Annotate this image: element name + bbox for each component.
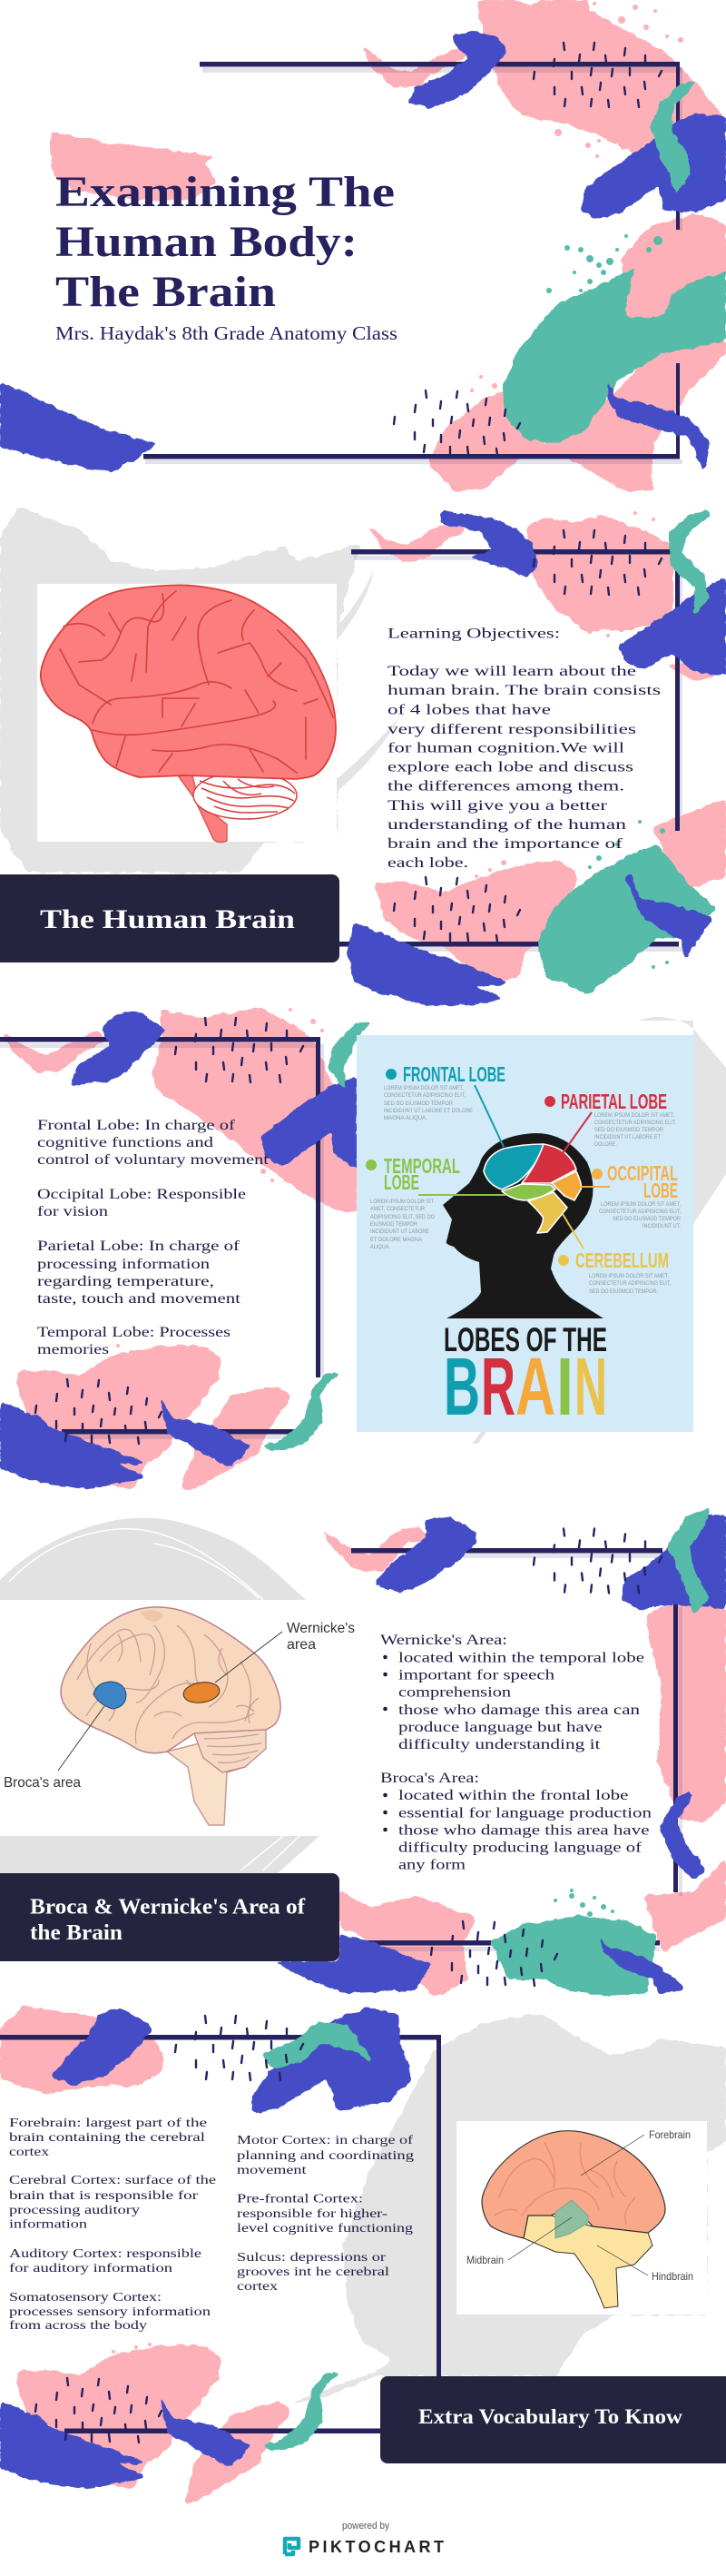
green splatter [546,234,662,293]
tick marks [35,2016,303,2443]
lobe descriptions text: Frontal Lobe: In charge of [37,1118,236,1133]
learning objectives text [388,627,661,871]
vocabulary column one: Forebrain: largest part of the [9,2117,207,2130]
pink brushes [0,2006,291,2502]
vocabulary column one: cortex [9,2146,49,2159]
placeholder captions: MAGNA ALIQUA. [384,1116,427,1121]
subtitle: Mrs. Haydak's 8th Grade Anatomy Class [55,322,397,344]
grey background brain silhouette [0,507,399,873]
placeholder captions: INCIDIDUNT UT LABORE ET [594,1135,661,1140]
title [55,168,395,316]
learning objectives text: for human cognition.We will [388,741,625,755]
lobe labels: LOBE [643,1179,678,1202]
green brush and blue brushes [0,31,726,472]
vocabulary column one: processes sensory information [9,2305,211,2319]
learning objectives text: the differences among them. [388,779,624,794]
blue and green brushes [70,1012,373,1170]
grey background silhouette [273,2014,726,2409]
placeholder captions: CONSECTETUR ADIPISICING ELIT, [384,1093,466,1099]
area bullet lists: any form [398,1858,466,1872]
area bullet lists: important for speech [398,1667,554,1683]
title: The Brain [55,268,276,316]
image: brain with broca and wernicke areas: area [287,1637,316,1653]
panel: title section [0,0,726,490]
lobe descriptions text: regarding temperature, [37,1274,214,1289]
learning objectives text: Learning Objectives: [388,627,560,641]
image: brain with broca and wernicke areas [0,1600,357,1836]
learning objectives text: very different responsibilities [388,722,636,737]
image: forebrain midbrain hindbrain: Midbrain [466,2254,504,2266]
placeholder captions: SED DO EIUSMOD TEMPOR [613,1217,682,1222]
lobe labels: CEREBELLUM [575,1249,669,1272]
learning objectives text: Today we will learn about the [388,664,636,679]
learning objectives text: explore each lobe and discuss [388,759,633,775]
lobe descriptions text: taste, touch and movement [37,1291,241,1307]
blue and green brushes [348,508,726,1005]
tick marks [35,1018,303,1444]
grey background shape [472,1017,726,1444]
vocabulary column two: cortex [237,2280,278,2294]
lower blue and green brushes [0,1371,345,1489]
lobe descriptions text: Temporal Lobe: Processes [37,1325,231,1340]
learning objectives text: understanding of the human [388,817,626,833]
lobe descriptions text [37,1118,270,1357]
placeholder captions: LOREM IPSUM DOLOR SIT AMET, [594,1113,674,1119]
title: Human Body: [55,218,358,266]
poster title: LOBES OF THE [444,1321,607,1358]
pink splatter [475,511,655,878]
placeholder captions: LOREM IPSUM DOLOR SIT AMET, [384,1086,464,1091]
wernicke's area marker [182,1680,221,1705]
vocabulary column one: from across the body [9,2319,147,2333]
poster title: A [515,1342,555,1433]
tick marks [394,530,662,942]
green splatter [588,820,669,969]
title: Examining The [55,168,395,216]
pink brushes [366,515,726,983]
area bullet lists [380,1633,652,1872]
area bullet lists: produce language but have [398,1720,603,1735]
leader lines [418,1085,610,1249]
frame [143,62,682,464]
placeholder captions: CONSECTETUR ADIPISICING ELIT, [589,1281,671,1287]
lower pink brush [18,2345,221,2489]
vocabulary column two: Motor Cortex: in charge of [237,2134,413,2147]
heading: broca and wernicke: Broca & Wernicke's Area of [30,1896,306,1920]
panel: lobes of the brain [0,1007,726,1489]
footer: powered by piktochart [285,2521,444,2556]
lower pink brush [18,1346,221,1489]
pink splatter [112,2343,152,2361]
poster title: N [574,1342,607,1433]
frame [0,1037,324,1439]
learning objectives text: each lobe. [388,855,468,871]
placeholder captions: LOREM IPSUM DOLOR SIT AMET, [589,1274,669,1279]
placeholder captions: INCIDIDUNT UT LABORE [370,1229,429,1235]
poster title: B [444,1342,480,1433]
heading: broca and wernicke [0,1873,339,1961]
lobe descriptions text: control of voluntary movement [37,1152,270,1168]
panel: the human brain [0,507,726,1005]
footer: powered by piktochart: powered by [342,2521,389,2532]
placeholder captions: ALIQUA. [370,1245,390,1250]
placeholder captions: ET DOLORE MAGNA [370,1238,422,1243]
icon: piktochart logo [285,2539,299,2554]
lobe labels: FRONTAL LOBE [403,1062,505,1086]
learning objectives text: This will give you a better [388,798,608,814]
vocabulary column one [9,2117,216,2333]
area bullet lists: those who damage this area have [398,1823,650,1838]
area bullet lists: Broca's Area: [380,1771,479,1786]
heading: the human brain: The Human Brain [40,904,295,934]
tick marks [394,43,662,455]
lobe descriptions text: memories [37,1342,109,1357]
placeholder captions: EIUSMOD TEMPOR [370,1222,418,1228]
image: forebrain midbrain hindbrain: Hindbrain [652,2270,693,2283]
lobe descriptions text: for vision [37,1204,108,1219]
blue and green brushes [272,1506,726,1997]
vocabulary column two: Sulcus: depressions or [237,2251,386,2265]
area bullet lists: located within the temporal lobe [398,1651,644,1665]
vocabulary column one: brain that is responsible for [9,2189,198,2203]
image: red brain [37,584,337,843]
placeholder captions: CONSECTETUR ADIPISICING ELIT, [599,1209,681,1215]
learning objectives text: brain and the importance of [388,836,623,852]
lobe descriptions text: processing information [37,1257,210,1272]
placeholder captions: SED DO EIUSMOD TEMPOR [594,1128,664,1133]
vocabulary column one: information [9,2217,87,2232]
panel: extra vocabulary [0,2006,726,2502]
lobe labels: OCCIPITAL [607,1161,678,1185]
area bullet lists: comprehension [398,1685,511,1700]
vocabulary column one: Cerebral Cortex: surface of the [9,2174,216,2187]
vocabulary column one: Auditory Cortex: responsible [9,2247,201,2261]
background brush strokes: pink [50,0,726,490]
placeholder captions: AMET, CONSECTETUR [370,1207,426,1212]
placeholder captions: ADIPISICING ELIT, SED DO [370,1215,435,1220]
vocabulary column two: Pre-frontal Cortex: [237,2192,363,2206]
placeholder captions: CONSECTETUR ADIPISICING ELIT, [594,1120,676,1126]
poster title: R [481,1342,515,1433]
green splatter [554,1889,614,1917]
footer: powered by piktochart: PIKTOCHART [309,2538,444,2556]
pink splatter [116,1008,324,1356]
frame lines [338,549,680,946]
frame [354,556,682,952]
area bullet lists: located within the frontal lobe [398,1788,628,1803]
image: forebrain midbrain hindbrain [456,2121,707,2314]
placeholder captions: INCIDIDUNT UT. [643,1224,681,1229]
placeholder captions: DOLORE. [594,1142,617,1148]
placeholder captions [370,1086,682,1295]
lobe labels: PARIETAL LOBE [561,1090,667,1113]
heading: extra vocabulary [380,2376,726,2463]
vocabulary column one: processing auditory [9,2204,140,2217]
lobe descriptions text: Occipital Lobe: Responsible [37,1187,246,1202]
vocabulary column one: brain containing the cerebral [9,2131,205,2145]
lobe descriptions text: Parietal Lobe: In charge of [37,1239,240,1254]
heading: broca and wernicke: the Brain [30,1921,123,1945]
lobe labels: LOBE [384,1170,419,1194]
vocabulary column two: movement [237,2164,307,2177]
vocabulary column two: grooves int he cerebral [237,2265,389,2279]
area bullet lists: difficulty producing language of [398,1840,643,1856]
vocabulary column one: for auditory information [9,2262,172,2275]
lower blue and green brushes [0,2371,345,2489]
poster title: I [556,1342,574,1433]
image: brain with broca and wernicke areas: Broca's area [4,1775,81,1791]
vocabulary column two: responsible for higher- [237,2207,388,2221]
placeholder captions: SED DO EIUSMOD TEMPOR. [589,1289,658,1295]
vocabulary column two: level cognitive functioning [237,2222,413,2235]
frame [0,2035,441,2433]
coloured brain lobes [484,1144,581,1233]
placeholder captions: INCIDIDUNT UT LABORE ET DOLORE [384,1109,473,1114]
learning objectives text: of 4 lobes that have [388,703,551,717]
learning objectives text: human brain. The brain consists [388,683,661,698]
placeholder captions: LOREM IPSUM DOLOR SIT [370,1199,434,1205]
grey background bowl [0,1518,319,1873]
image: lobes of the brain poster [357,1035,693,1433]
area bullet lists: Wernicke's Area: [380,1633,507,1648]
panel: broca and wernicke's area [0,1506,726,1998]
heading: the human brain [0,874,339,962]
lobe descriptions text: cognitive functions and [37,1135,213,1150]
vocabulary column two: planning and coordinating [237,2149,414,2163]
area bullet lists: those who damage this area can [398,1703,640,1718]
vocabulary column two [237,2134,414,2294]
area bullet lists: essential for language production [398,1805,652,1821]
frame [351,1548,682,1951]
lobe labels: TEMPORAL [384,1154,460,1178]
head silhouette [443,1133,603,1318]
poster title [444,1321,607,1433]
pink brushes [319,1526,726,1998]
broca's area marker [93,1682,126,1709]
area bullet lists: difficulty understanding it [398,1737,601,1752]
vocabulary column one: Somatosensory Cortex: [9,2291,162,2305]
image: brain with broca and wernicke areas: Wernicke's [287,1621,355,1636]
placeholder captions: SED DO EIUSMOD TEMPOR [384,1101,454,1107]
pink brushes [0,1007,357,1489]
image: forebrain midbrain hindbrain: Forebrain [649,2128,691,2141]
pink splatter [470,2,683,392]
lobe labels [366,1062,678,1272]
blue and green brushes [51,2008,412,2113]
tick marks [431,1529,662,1986]
placeholder captions: LOREM IPSUM DOLOR SIT AMET, [601,1202,681,1208]
heading: extra vocabulary: Extra Vocabulary To Know [418,2405,682,2428]
